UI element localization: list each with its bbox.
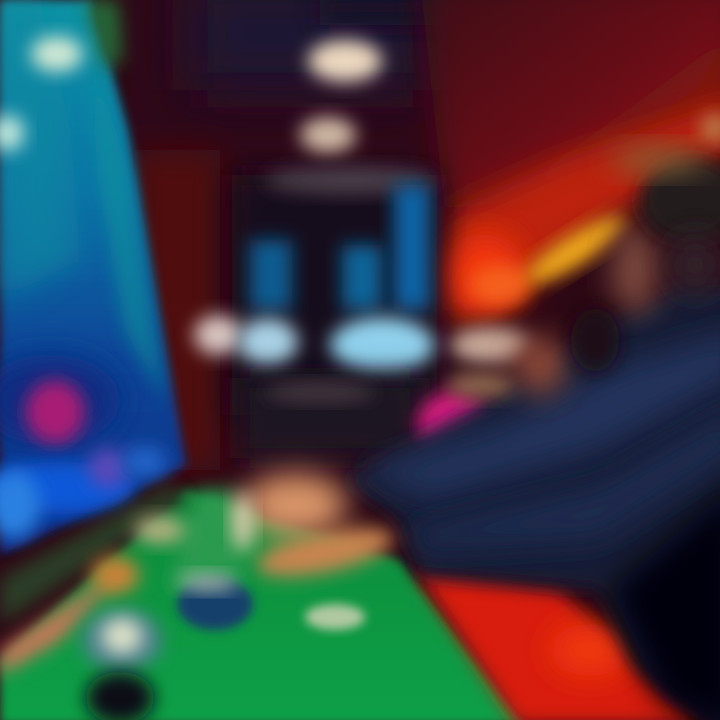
panel: player seated on the right <box>232 147 720 720</box>
blue reels <box>250 185 430 310</box>
ceiling lights <box>300 40 382 153</box>
white lit buttons <box>194 315 434 373</box>
red wall, upper right <box>420 0 720 325</box>
panel: gaming table <box>0 485 700 720</box>
panel: large game screen on the left <box>0 0 186 555</box>
raised hand <box>446 308 619 398</box>
bright blue lower band <box>0 446 167 539</box>
chips and tokens <box>82 516 365 720</box>
machine top <box>265 166 435 194</box>
table edge <box>0 485 190 625</box>
magenta game symbol <box>25 380 85 444</box>
icon: white screen lights <box>0 36 83 151</box>
hands on table <box>232 473 398 586</box>
body in navy sweater <box>345 285 720 720</box>
magenta accent beside machine <box>417 391 493 459</box>
machine base <box>240 378 420 458</box>
head <box>611 226 659 314</box>
red table side <box>415 570 700 720</box>
panel: central slot machine <box>194 40 437 458</box>
